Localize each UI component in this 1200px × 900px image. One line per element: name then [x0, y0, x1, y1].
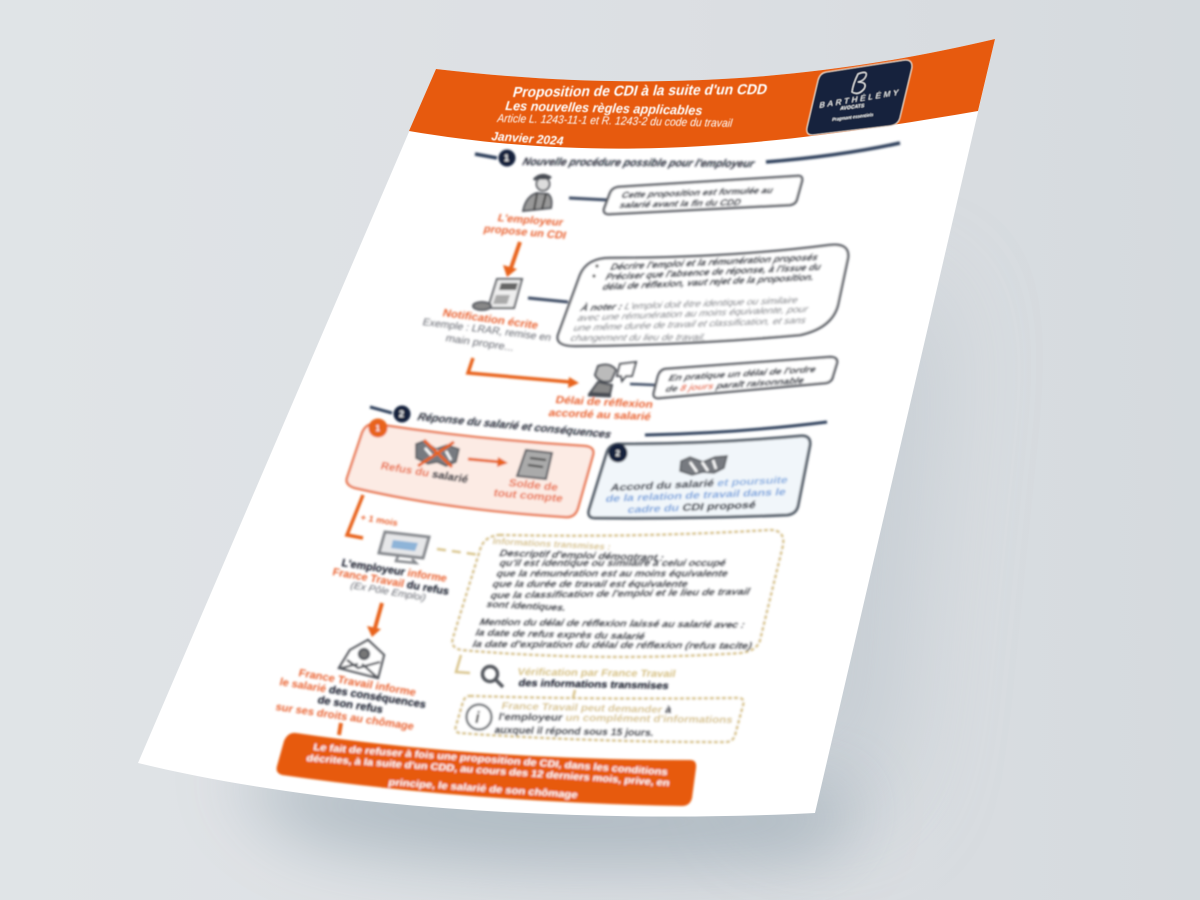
callout: content of proposal: Décrire l'emploi et la rémunération proposés	[609, 252, 820, 273]
request text	[493, 701, 734, 739]
label: written notification: Exemple : LRAR, remise en	[421, 317, 553, 344]
connector: document to details	[528, 298, 568, 302]
label: France Travail informs: sur ses droits au chômage	[274, 701, 415, 733]
request text: France Travail peut demander à	[500, 701, 673, 716]
logo monogram	[852, 72, 866, 93]
label: final settlement: Solde de	[507, 477, 559, 494]
connector: one month	[347, 495, 399, 538]
label: reflection period	[547, 394, 654, 423]
panel: transmitted information: Informations transmises :	[492, 536, 612, 552]
callout: proposal timing: salarié avant la fin du CDD	[618, 197, 743, 210]
badge: acceptance: 2	[616, 449, 620, 458]
acceptance text: de la relation de travail dans le	[604, 487, 787, 505]
callout: content of proposal: une même durée de travail et classification, et sans	[572, 314, 808, 333]
label: France Travail informs: de son refus	[316, 694, 384, 716]
connector: person to note	[630, 384, 655, 385]
badge: acceptance	[608, 444, 628, 462]
logo subtitle: AVOCATS	[840, 103, 865, 112]
section 1 heading	[475, 143, 900, 170]
text: verification	[516, 667, 677, 692]
panel: transmitted information: que la durée de travail est équivalente	[491, 579, 690, 590]
title: Proposition de CDI à la suite d'un CDD	[511, 82, 769, 101]
section 1 heading: Nouvelle procédure possible pour l'employeur	[521, 156, 756, 170]
callout: eight days: En pratique un délai de l'ordre	[667, 364, 817, 383]
logo tagline: Pragmant essentiels	[832, 112, 874, 122]
banner: conclusion	[277, 733, 696, 806]
icon: handshake	[680, 456, 727, 475]
arrow: to conclusion	[339, 723, 341, 735]
legal reference: Article L. 1243-11-1 et R. 1243-2 du code du travail	[496, 113, 733, 130]
label: France Travail informs: France Travail informe	[297, 667, 417, 699]
callout: content of proposal: changement du lieu de travail.	[569, 331, 708, 343]
icon: final settlement	[517, 450, 552, 479]
panel: refusal	[347, 418, 593, 517]
label: France Travail informs: le salarié des conséquences	[278, 676, 427, 711]
badge: refusal	[368, 418, 388, 438]
label: employer proposes: L'employeur	[496, 212, 565, 229]
panel: transmitted information: que la rémunération est au moins équivalente	[495, 569, 730, 579]
section 2 heading: 2	[399, 409, 404, 419]
callout: content of proposal: avec une rémunération au moins équivalente, pour	[576, 303, 811, 323]
callout: content of proposal: À noter : L'emploi doit être identique ou similaire	[578, 294, 800, 313]
header band	[409, 39, 995, 149]
acceptance text	[604, 475, 789, 516]
text: verification: Vérification par France Travail	[516, 667, 677, 680]
icon: person thinking	[588, 362, 636, 396]
section 2 heading	[370, 406, 827, 441]
header text	[491, 82, 769, 148]
icon: information: i	[475, 708, 481, 727]
banner: conclusion: principe, le salarié de son chômage	[387, 777, 579, 801]
panel: transmitted information: Mention du délai de réflexion laissé au salarié avec :	[478, 617, 746, 631]
panel: acceptance	[589, 436, 810, 518]
arrow: down to notification	[503, 242, 520, 277]
connector: employer to note	[569, 198, 608, 200]
connector: computer to information	[437, 549, 480, 555]
label: written notification: Notification écrite	[441, 307, 540, 332]
label: France Travail informs	[274, 667, 427, 733]
label: written notification: main propre...	[444, 333, 515, 354]
label: employer proposes: propose un CDI	[482, 223, 568, 242]
label: employer proposes	[482, 212, 568, 242]
icon: crossed handshake	[416, 440, 459, 467]
request text: auxquel il répond sous 15 jours.	[493, 725, 655, 739]
panel: transmitted information: la date d'expiration du délai de réflexion (refus tacite)	[471, 639, 753, 652]
label: employer informs: France Travail du refus	[331, 566, 450, 598]
callout: eight days: de 8 jours paraît raisonnable	[664, 375, 805, 394]
connector: one month: + 1 mois	[360, 512, 399, 528]
panel: transmitted information: Descriptif d'emploi démontrant :	[498, 548, 665, 564]
panel: transmitted information: la date de refus exprès du salarié	[474, 628, 647, 643]
connector: verification to request	[572, 690, 575, 702]
badge: refusal: 1	[376, 424, 380, 433]
icon: employer	[523, 175, 552, 211]
sheet	[138, 39, 995, 817]
label: final settlement: tout compte	[492, 487, 564, 505]
sheet drop shadow	[230, 300, 930, 861]
banner: conclusion: Le fait de refuser à fois une proposition de CDI, dans les conditions	[312, 742, 669, 778]
icon: information	[466, 704, 492, 730]
arrow: notification to reflection period	[468, 358, 579, 388]
label: written notification	[421, 307, 553, 354]
label: reflection period: Délai de réflexion	[554, 394, 654, 411]
label: final settlement	[492, 477, 564, 505]
banner: conclusion: décrites, à la suite d'un CDD, au cours des 12 derniers mois, prive, en	[305, 753, 671, 789]
panel: transmitted information: sont identiques.	[485, 599, 567, 614]
label: employer informs	[331, 557, 450, 604]
callout: proposal timing	[604, 176, 802, 214]
subtitle: Les nouvelles règles applicables	[505, 98, 703, 118]
label: employer informs: L'employeur informe	[340, 557, 448, 585]
label: refusal: Refus du salarié	[379, 460, 470, 486]
request text: l'employeur un complément d'informations	[497, 712, 734, 726]
acceptance text: Accord du salarié et poursuite	[609, 475, 789, 494]
callout: content of proposal: Préciser que l'absence de réponse, à l'issue du	[604, 262, 822, 283]
icon: open envelope	[339, 640, 384, 678]
date: Janvier 2024	[491, 129, 564, 148]
panel: additional information request	[456, 696, 743, 742]
callout: content of proposal	[558, 245, 848, 346]
callout: eight days	[654, 357, 837, 398]
arrow: down to letter	[367, 603, 382, 637]
acceptance text: cadre du CDI proposé	[626, 500, 757, 516]
infographic content	[274, 143, 900, 806]
arrow: refusal to settlement	[468, 457, 508, 467]
logo	[807, 60, 912, 135]
section 1 heading: 1	[504, 153, 509, 163]
callout: content of proposal: délai de réflexion, vaut rejet de la proposition.	[601, 272, 815, 293]
icon: written document	[473, 279, 522, 310]
icon: magnifier	[482, 666, 503, 687]
section 2 heading: Réponse du salarié et conséquences	[416, 411, 613, 441]
panel: transmitted information	[452, 530, 783, 657]
label: employer informs: (Ex Pôle Emploi)	[349, 580, 427, 604]
panel: transmitted information: qu'il est identique ou similaire à celui occupé	[498, 558, 728, 569]
text: verification: des informations transmises	[517, 678, 670, 692]
panel: transmitted information: que la classification de l'emploi et le lieu de travail	[489, 587, 751, 601]
callout: proposal timing: Cette proposition est formulée au	[620, 185, 775, 200]
label: reflection period: accordé au salarié	[547, 407, 652, 423]
logo name: BARTHÉLÉMY	[819, 87, 900, 110]
icon: computer	[379, 532, 429, 563]
connector: information to verification	[456, 655, 470, 673]
